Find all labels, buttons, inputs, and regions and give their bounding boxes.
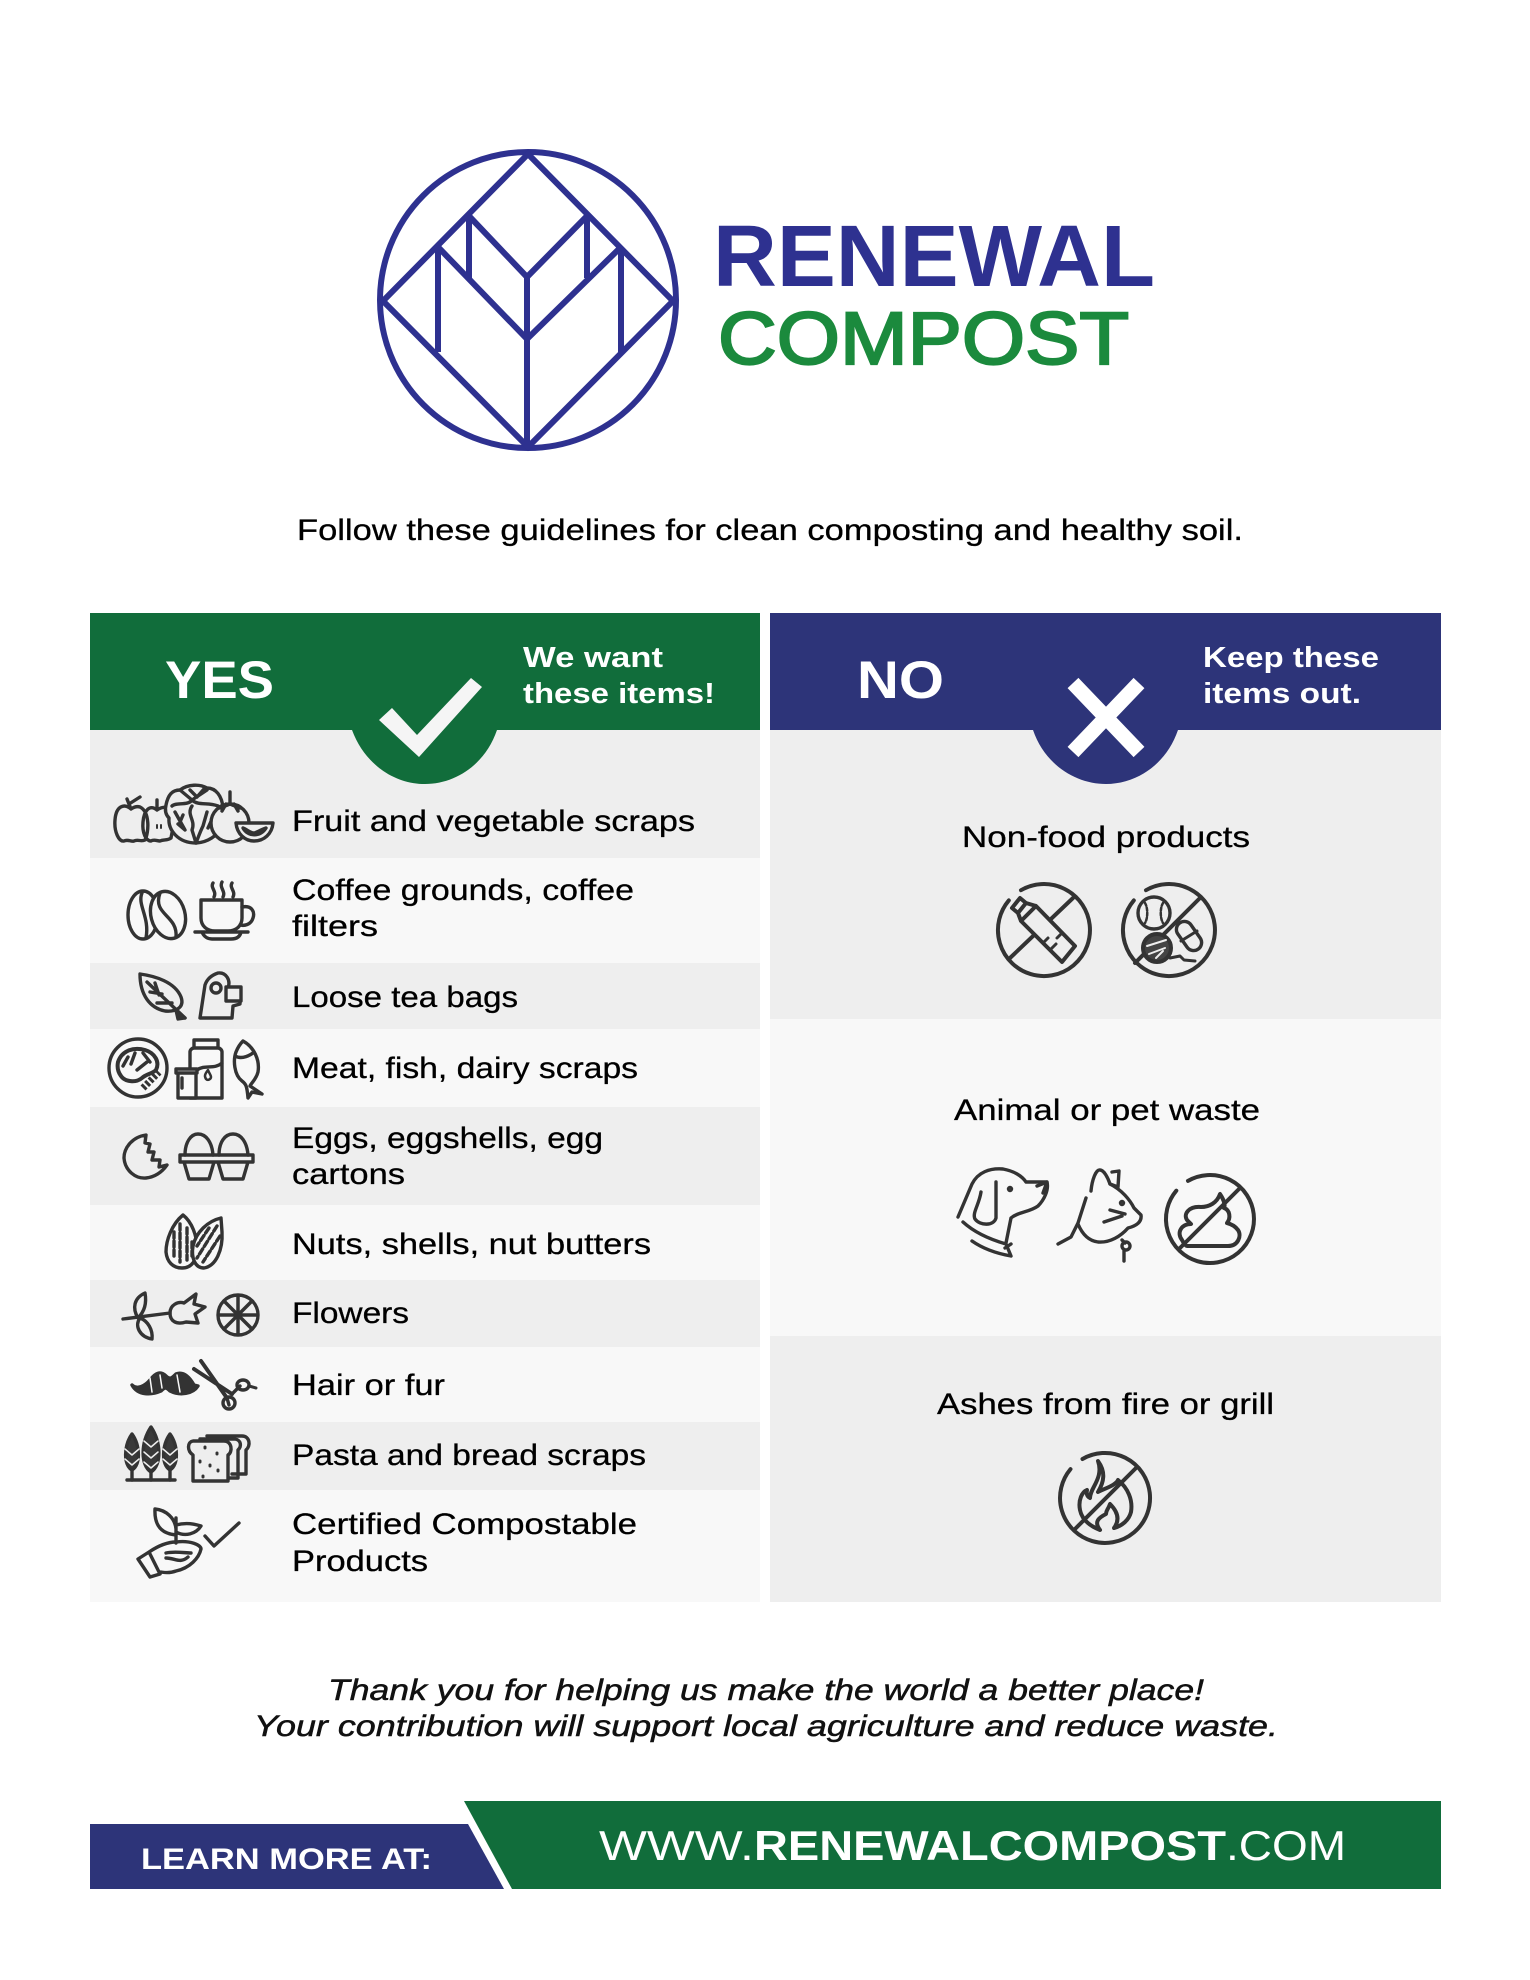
- icon: coffee beans and cup: [128, 882, 254, 943]
- thank you message: Your contribution will support local agriculture and reduce waste.: [254, 1710, 1278, 1743]
- label: cartons: [292, 1158, 405, 1191]
- icon: hand with sprout and check: [138, 1509, 239, 1577]
- logo emblem: [380, 152, 676, 448]
- icon: no fire: [1060, 1453, 1150, 1543]
- yes subheading: We want: [523, 642, 663, 674]
- item: flowers: [123, 1293, 409, 1339]
- learn more label: LEARN MORE AT:: [141, 1843, 432, 1876]
- website url: WWW.: [599, 1822, 754, 1869]
- no subheading: [1203, 642, 1379, 710]
- icon: no pet waste: [1166, 1175, 1254, 1263]
- panel: yes: [90, 613, 760, 1602]
- panel: no: [770, 613, 1441, 1602]
- label: [292, 874, 634, 943]
- section: animal or pet waste: [954, 1094, 1260, 1263]
- label: Flowers: [292, 1297, 409, 1330]
- item: certified compostable: [138, 1508, 637, 1578]
- icon: no toys and pills: [1123, 884, 1215, 976]
- label: Ashes from fire or grill: [937, 1388, 1274, 1421]
- label: Non-food products: [962, 821, 1250, 854]
- section: non-food products: [962, 821, 1250, 976]
- thank you message: Thank you for helping us make the world a better place!: [328, 1674, 1205, 1707]
- icon: check mark: [379, 678, 482, 757]
- item: pasta and bread: [125, 1427, 646, 1481]
- item: hair: [132, 1361, 445, 1409]
- yes header band: [90, 613, 760, 784]
- website url: .COM: [1226, 1822, 1346, 1869]
- label: Animal or pet waste: [954, 1094, 1260, 1127]
- tagline: Follow these guidelines for clean composting and healthy soil.: [297, 514, 1243, 547]
- label: Meat, fish, dairy scraps: [292, 1052, 638, 1085]
- label: Hair or fur: [292, 1369, 445, 1402]
- label: Coffee grounds, coffee: [292, 874, 634, 907]
- yes subheading: these items!: [523, 678, 715, 710]
- website band: [464, 1801, 1441, 1889]
- no subheading: Keep these: [1203, 642, 1379, 674]
- label: Products: [292, 1545, 428, 1578]
- icon: dog: [958, 1169, 1047, 1256]
- icon: no plastic bottle: [998, 884, 1090, 976]
- section backgrounds: [770, 730, 1441, 1602]
- item: tea bags: [140, 973, 518, 1019]
- icon: cat: [1058, 1170, 1141, 1261]
- item: coffee: [128, 874, 634, 943]
- icon: almonds: [166, 1215, 222, 1268]
- website url: RENEWALCOMPOST: [754, 1822, 1226, 1869]
- label: filters: [292, 910, 378, 943]
- website url: [599, 1822, 1346, 1869]
- label: Pasta and bread scraps: [292, 1439, 646, 1472]
- item: nuts: [166, 1215, 651, 1268]
- logo wordmark: renewal: RENEWAL: [713, 208, 1155, 305]
- item: meat, fish, dairy: [109, 1039, 638, 1098]
- logo: [380, 152, 1155, 448]
- label: Eggs, eggshells, egg: [292, 1122, 603, 1155]
- label: [292, 1122, 603, 1191]
- icon: fruit and vegetables: [115, 785, 273, 843]
- yes subheading: [523, 642, 715, 710]
- icon: wheat and bread: [125, 1427, 249, 1481]
- yes heading: YES: [165, 651, 274, 710]
- no header band: [770, 613, 1441, 784]
- section: ashes: [937, 1388, 1274, 1543]
- icon: moustache and scissors: [132, 1361, 256, 1409]
- icon: eggshell and carton: [124, 1134, 253, 1179]
- icon: x mark: [1073, 683, 1139, 752]
- label: Fruit and vegetable scraps: [292, 805, 695, 838]
- learn more band: [90, 1824, 504, 1889]
- no heading: NO: [857, 651, 944, 710]
- item: fruit and vegetable scraps: [115, 785, 695, 843]
- logo wordmark: compost: COMPOST: [718, 297, 1129, 380]
- label: Certified Compostable: [292, 1508, 637, 1541]
- yes list rows: [90, 730, 760, 1602]
- label: [292, 1508, 637, 1578]
- footer banner: [90, 1801, 1441, 1889]
- no subheading: items out.: [1203, 678, 1361, 710]
- thank you message: [254, 1674, 1278, 1743]
- icon: rose and citrus flower: [123, 1293, 258, 1339]
- item: eggs: [124, 1122, 603, 1191]
- icon: leaf and tea bag: [140, 973, 241, 1019]
- label: Loose tea bags: [292, 981, 518, 1014]
- icon: plate, milk carton, fish: [109, 1039, 262, 1098]
- label: Nuts, shells, nut butters: [292, 1228, 651, 1261]
